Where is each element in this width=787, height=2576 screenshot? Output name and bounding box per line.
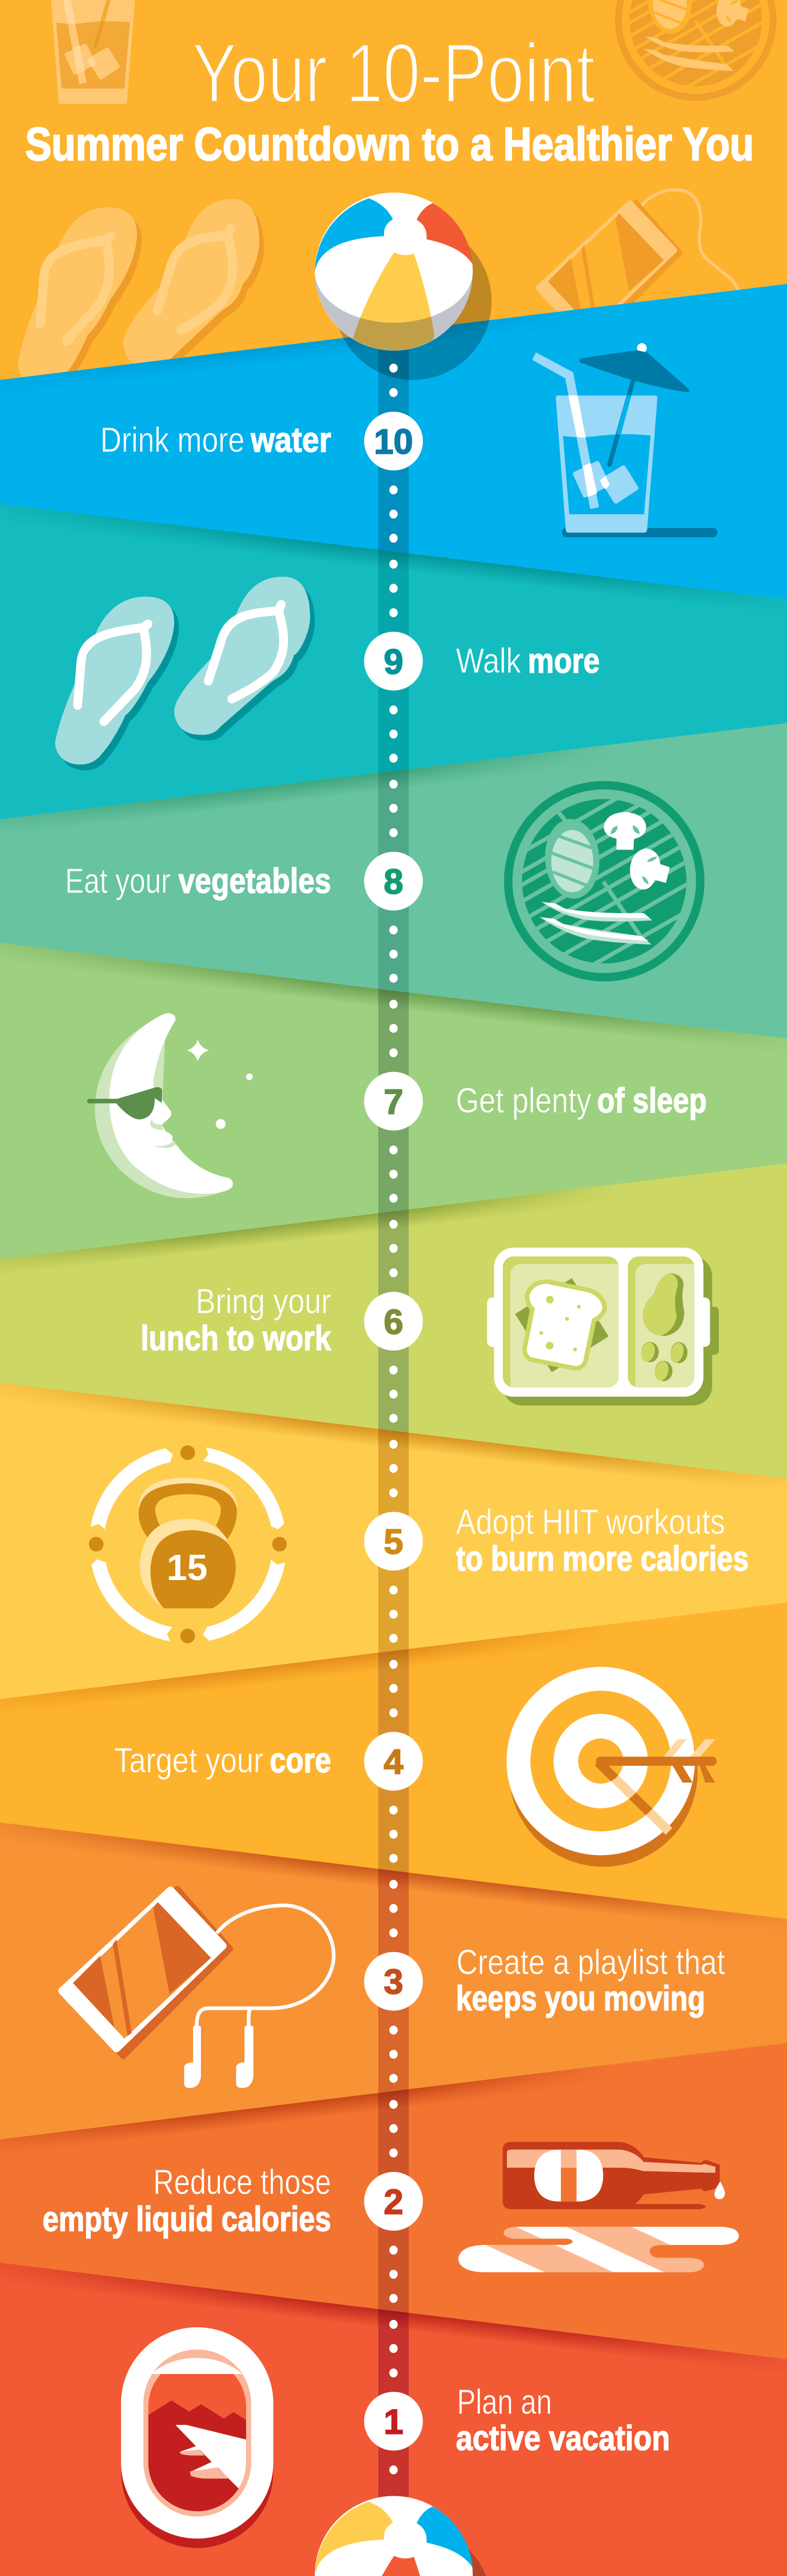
icon: flip-flops bbox=[55, 577, 315, 770]
title bbox=[25, 26, 754, 170]
label: create a playlist bbox=[456, 1943, 725, 2018]
label: walk more: Walk bbox=[456, 641, 521, 681]
panel: step 8 eat your vegetables bbox=[0, 723, 787, 1040]
panel: step 4 target your core bbox=[0, 1603, 787, 1920]
panel: step 7 get plenty of sleep bbox=[0, 943, 787, 1260]
badge 5: 5 bbox=[384, 1522, 403, 1562]
panel: step 1 plan an active vacation bbox=[0, 2263, 787, 2576]
badge 2 bbox=[364, 2172, 423, 2231]
panel: step 9 walk more bbox=[0, 504, 787, 820]
icon: target with arrow bbox=[507, 1667, 717, 1867]
icon: kettlebell with timer ring: 15 bbox=[167, 1547, 208, 1588]
badge 4 bbox=[364, 1732, 423, 1790]
background icon: phone bbox=[539, 190, 739, 343]
top beach ball bbox=[315, 193, 473, 351]
label: walk more: more bbox=[528, 641, 600, 681]
badge 7 bbox=[364, 1072, 423, 1130]
icon: airplane window bbox=[121, 2327, 273, 2548]
panel: step 10 drink more water bbox=[0, 284, 787, 600]
label: target your core: core bbox=[270, 1741, 331, 1780]
icon: kettlebell with timer ring bbox=[89, 1445, 287, 1644]
icon: crescent moon with sunglasses bbox=[87, 1013, 253, 1198]
background icon: iced drink bbox=[30, 0, 186, 108]
panel: step 2 reduce empty liquid calories bbox=[0, 2043, 787, 2360]
label: target your core: Target your bbox=[114, 1741, 263, 1780]
badge 2: 2 bbox=[384, 2182, 403, 2222]
badge 3: 3 bbox=[384, 1963, 403, 2002]
timeline spine bbox=[378, 330, 409, 2529]
label: get plenty of sleep: of sleep bbox=[597, 1081, 707, 1120]
badge 10: 10 bbox=[374, 422, 413, 462]
panel: header bbox=[0, 0, 787, 393]
label: reduce empty liquid calories: Reduce those bbox=[153, 2162, 331, 2202]
label: adopt hiit workouts: Adopt HIIT workouts bbox=[456, 1502, 725, 1542]
badge 7: 7 bbox=[384, 1082, 403, 1122]
beach ball shadow bbox=[334, 222, 492, 380]
label: reduce empty liquid calories bbox=[42, 2162, 331, 2239]
label: bring your lunch to work: lunch to work bbox=[141, 1319, 332, 1358]
icon: grill with vegetables bbox=[508, 754, 700, 1010]
panel: step 5 adopt hiit workouts bbox=[0, 1383, 787, 1700]
label: eat your vegetables: Eat your bbox=[65, 862, 171, 900]
badge 3 bbox=[364, 1952, 423, 2011]
background icon: grill bbox=[618, 0, 773, 124]
label: drink more water: water bbox=[250, 420, 331, 460]
panel: step 6 bring your lunch to work bbox=[0, 1163, 787, 1480]
icon: lunch box bbox=[487, 1248, 719, 1405]
label: create a playlist: Create a playlist that bbox=[456, 1943, 725, 1982]
bottom beach ball bbox=[315, 2496, 492, 2576]
label: drink more water: Drink more bbox=[100, 420, 244, 460]
icon: spilled bottle bbox=[446, 2142, 739, 2272]
badge 6: 6 bbox=[384, 1302, 403, 1342]
label: create a playlist: keeps you moving bbox=[456, 1979, 705, 2018]
badge 8: 8 bbox=[384, 862, 403, 902]
badge 8 bbox=[364, 852, 423, 910]
label: adopt hiit workouts bbox=[456, 1502, 749, 1578]
label: eat your vegetables bbox=[65, 862, 331, 900]
badge 1: 1 bbox=[384, 2402, 403, 2442]
badge 9: 9 bbox=[384, 642, 403, 682]
title: Your 10-Point bbox=[192, 26, 595, 120]
badge 4: 4 bbox=[384, 1742, 403, 1782]
background icon: flip-flops bbox=[18, 199, 264, 393]
badge 9 bbox=[364, 632, 423, 691]
label: plan an active vacation: active vacation bbox=[456, 2419, 670, 2458]
badge 1 bbox=[364, 2392, 423, 2451]
number badges bbox=[364, 412, 423, 2451]
badge 6 bbox=[364, 1292, 423, 1351]
label: get plenty of sleep: Get plenty bbox=[456, 1081, 591, 1120]
label: eat your vegetables: vegetables bbox=[178, 862, 331, 900]
badge 5 bbox=[364, 1512, 423, 1571]
label: walk more bbox=[456, 641, 600, 681]
timeline dots bbox=[389, 364, 398, 2474]
label: reduce empty liquid calories: empty liquid calories bbox=[42, 2200, 331, 2239]
label: plan an active vacation: Plan an bbox=[457, 2382, 552, 2422]
label: get plenty of sleep bbox=[456, 1081, 707, 1120]
icon: glass of water with umbrella bbox=[532, 343, 718, 537]
badge 10 bbox=[364, 412, 423, 471]
label: plan an active vacation bbox=[456, 2382, 670, 2458]
icon: phone with earbuds bbox=[62, 1889, 334, 2088]
label: bring your lunch to work bbox=[141, 1281, 332, 1358]
label: bring your lunch to work: Bring your bbox=[196, 1281, 331, 1321]
panel: step 3 create a playlist bbox=[0, 1822, 787, 2140]
